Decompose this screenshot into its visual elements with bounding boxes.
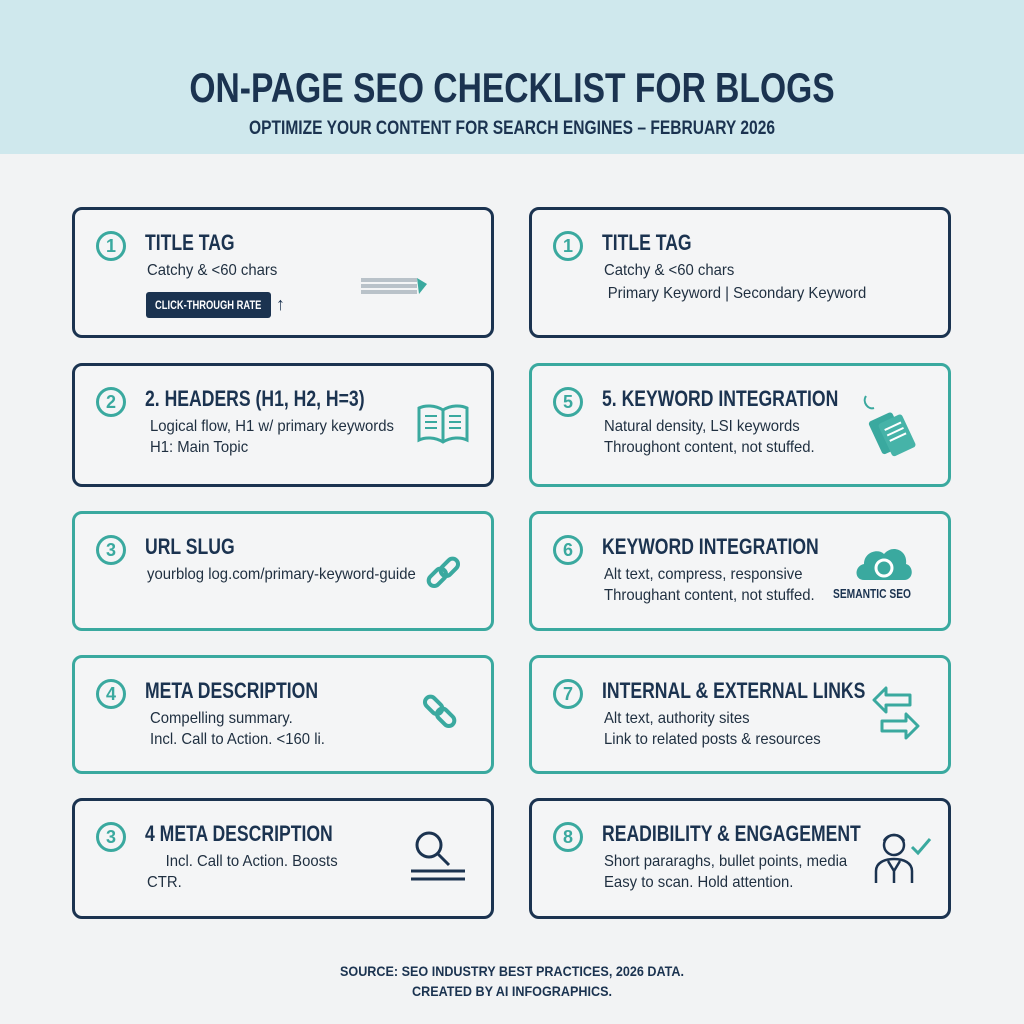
panel: headers: Logical flow, H1 w/ primary keywords	[150, 418, 394, 435]
panel: headers: 2. HEADERS (H1, H2, H=3)	[145, 386, 365, 411]
footer source	[340, 963, 684, 999]
panel: title tag right: 1	[563, 236, 573, 256]
icon: swap arrows	[872, 686, 920, 740]
icon: link	[422, 694, 456, 728]
header band	[0, 0, 1024, 154]
panel: keyword integration 5: Throughont content, not stuffed.	[604, 439, 815, 456]
icon: magnifier	[411, 832, 465, 880]
icon: open book	[418, 404, 468, 444]
panel: meta description 2: Incl. Call to Action. Boosts	[166, 853, 338, 870]
panel: meta description	[72, 655, 494, 774]
panel: meta description: Incl. Call to Action. <160 li.	[150, 731, 325, 748]
panel: readability: Short pararaghs, bullet points, media	[604, 853, 847, 870]
panel: readability: 8	[563, 827, 573, 847]
panel: internal & external links: INTERNAL & EXTERNAL LINKS	[602, 678, 865, 703]
icon: link	[426, 556, 460, 588]
panel: title tag right	[529, 207, 951, 338]
panel: title tag right: TITLE TAG	[602, 230, 692, 255]
panel: internal & external links: Alt text, authority sites	[604, 710, 750, 727]
title: ON-PAGE SEO CHECKLIST FOR BLOGS	[189, 64, 835, 111]
panel: meta description: META DESCRIPTION	[145, 678, 318, 703]
panel: keyword integration 6: KEYWORD INTEGRATION	[602, 534, 819, 559]
panel: internal & external links: 7	[563, 684, 573, 704]
panel: headers: H1: Main Topic	[150, 439, 248, 456]
panel: internal & external links	[529, 655, 951, 774]
footer source: SOURCE: SEO INDUSTRY BEST PRACTICES, 2026 DATA.	[340, 963, 684, 979]
panel: readability: READIBILITY & ENGAGEMENT	[602, 821, 861, 846]
footer source: CREATED BY AI INFOGRAPHICS.	[412, 983, 612, 999]
panel: title tag left: Catchy & <60 chars	[147, 262, 277, 279]
badge: click-through rate: CLICK-THROUGH RATE	[155, 298, 262, 312]
panel: keyword integration 6: 6	[563, 540, 573, 560]
panel: title tag left: 1	[106, 236, 116, 256]
panel: keyword integration 6: Throughant content, not stuffed.	[604, 587, 815, 604]
badge: click-through rate	[146, 292, 271, 318]
panel: meta description 2: 4 META DESCRIPTION	[145, 821, 333, 846]
label: semantic seo: SEMANTIC SEO	[833, 587, 911, 601]
panel: url slug: 3	[106, 540, 116, 560]
panel: title tag left	[72, 207, 494, 338]
icon: up arrow: ↑	[276, 294, 285, 314]
panel: keyword integration 6: Alt text, compress, responsive	[604, 566, 802, 583]
panel: headers: 2	[106, 392, 116, 412]
panel: keyword integration 5: 5	[563, 392, 573, 412]
subtitle: OPTIMIZE YOUR CONTENT FOR SEARCH ENGINES – FEBRUARY 2026	[249, 118, 775, 139]
panel: internal & external links: Link to related posts & resources	[604, 731, 821, 748]
panel: title tag right: Primary Keyword | Secondary Keyword	[608, 285, 866, 302]
panel: keyword integration 5	[529, 363, 951, 487]
panel: meta description: 4	[106, 684, 116, 704]
panel: keyword integration 5: Natural density, LSI keywords	[604, 418, 800, 435]
panel: readability	[529, 798, 951, 919]
icon: tags	[864, 396, 916, 456]
panel: keyword integration 5: 5. KEYWORD INTEGRATION	[602, 386, 838, 411]
panel: url slug: URL SLUG	[145, 534, 235, 559]
icon: person with check	[874, 834, 931, 883]
panel: meta description: Compelling summary.	[150, 710, 293, 727]
panel: meta description 2: CTR.	[147, 874, 182, 891]
panel: meta description 2: 3	[106, 827, 116, 847]
panel: url slug: yourblog log.com/primary-keyword-guide	[147, 566, 416, 583]
panel: headers	[72, 363, 494, 487]
icon: cloud camera	[856, 549, 912, 580]
panel: keyword integration 6	[529, 511, 951, 631]
icon: progress grid	[361, 278, 427, 294]
panel: title tag right: Catchy & <60 chars	[604, 262, 734, 279]
panel: title tag left: TITLE TAG	[145, 230, 235, 255]
panel: url slug	[72, 511, 494, 631]
panel: meta description 2	[72, 798, 494, 919]
panel: readability: Easy to scan. Hold attention.	[604, 874, 793, 891]
